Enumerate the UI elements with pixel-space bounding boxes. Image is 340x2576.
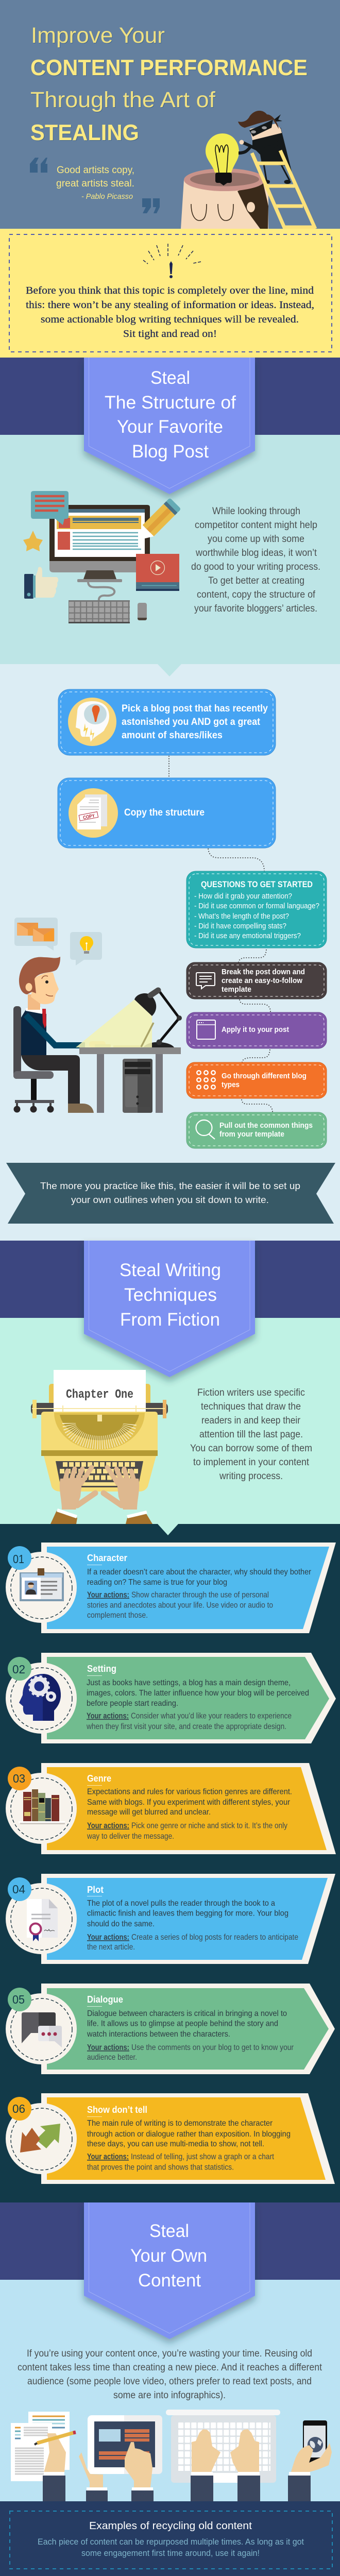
card 05: dialogue: 05 [12, 1993, 25, 2006]
card 04: plot: climactic finish and leaves them begging for more. Your blog [87, 1909, 288, 1918]
step: questions to get started: - Did it have compelling stats? [194, 922, 286, 930]
card 06: show don't tell: Your actions: [87, 2153, 129, 2161]
card 03: genre: way to deliver the message. [87, 1832, 174, 1841]
card 04: plot: the next article. [87, 1943, 135, 1952]
card 02: setting: Setting [87, 1664, 116, 1674]
card 06: show don't tell [6, 2093, 335, 2184]
card 04: plot: should do the same. [87, 1920, 155, 1928]
card 04: plot: Create a series of blog posts for readers to anticipate [131, 1933, 298, 1942]
banner: steal your own content: Steal [149, 2221, 189, 2241]
card 06: show don't tell: these days, you can use multi-media to show, not tell. [87, 2140, 264, 2148]
icon: envelope thought bubble [14, 918, 58, 951]
hand writing on documents [11, 2412, 76, 2501]
text: fiction writers: writing process. [219, 1471, 283, 1482]
ribbon: practice note: The more you practice like this, the easier it will be to set up [40, 1181, 300, 1191]
card 03: genre: Same with blogs. If you experiment with different styles, your [87, 1798, 291, 1807]
card 05: dialogue: Dialogue [87, 1994, 123, 2005]
text: reuse content [18, 2348, 322, 2401]
text: fiction writers: You can borrow some of them [190, 1443, 312, 1454]
banner: steal writing techniques [84, 1241, 255, 1377]
panel: fiction techniques background [0, 1241, 340, 1524]
banner: steal the structure: Blog Post [132, 442, 209, 462]
icon: dot grid [197, 1071, 215, 1089]
text: reuse content: audience (some people love video, others prefer to read text posts, and [27, 2376, 312, 2387]
text: competitor content: competitor content might help [195, 520, 317, 531]
title [30, 23, 308, 145]
card 03: genre: Your actions: [87, 1822, 129, 1830]
card 03: genre: Genre [87, 1773, 111, 1784]
illustration: typewriter [31, 1370, 168, 1524]
card 02: setting: 02 [12, 1663, 25, 1676]
intro text [26, 285, 314, 340]
banner: steal your own content: Your Own [130, 2246, 207, 2266]
step: pick a blog post: Pick a blog post that has recently [122, 703, 268, 714]
banner: steal writing techniques: Techniques [124, 1285, 217, 1305]
connector [242, 1099, 273, 1112]
step: apply it to your post: Apply it to your post [222, 1025, 289, 1034]
card 04: plot: Your actions: [87, 1933, 129, 1942]
text: competitor content: you come up with some [208, 534, 304, 545]
card 05: dialogue: life. It allows us to glimpse at people behind the story and [87, 2020, 278, 2028]
text: fiction writers: attention till the last page. [199, 1429, 303, 1440]
illustration: computer with blog elements [23, 491, 181, 623]
card 01: character: reading on? The same is true for your blog [87, 1578, 227, 1587]
title: STEALING [30, 120, 139, 145]
text: competitor content: worthwhile blog ideas, it won’t [195, 548, 317, 558]
card 02: setting: Your actions: [87, 1711, 129, 1721]
step: questions to get started: - What’s the length of the post? [194, 912, 289, 921]
tablet with hands [79, 2415, 162, 2501]
panel: examples intro: Each piece of content can be repurposed multiple times. As long as it got [38, 2537, 304, 2547]
card 01: character: complement those. [87, 1611, 148, 1620]
title: CONTENT PERFORMANCE [30, 55, 308, 80]
connector [208, 849, 264, 871]
step: break the post down: create an easy-to-follow [222, 976, 302, 985]
illustration: man at desk [13, 918, 182, 1113]
step: pick a blog post: astonished you AND got a great [122, 717, 261, 727]
icon: id badge [20, 1568, 64, 1601]
step: apply it to your post [186, 1012, 327, 1048]
card 02: setting [6, 1653, 336, 1743]
icon: copied document [77, 794, 107, 829]
step: questions to get started: QUESTIONS TO GET STARTED [201, 879, 313, 889]
step: pull out common things [186, 1112, 327, 1148]
title: Improve Your [31, 23, 165, 48]
text: fiction writers: readers in and keep their [201, 1415, 301, 1426]
icon: thumbs up [24, 567, 58, 599]
icon: opposing arrows [20, 2124, 60, 2153]
paper: Chapter One [66, 1388, 133, 1402]
card 06: show don't tell: Show don’t tell [87, 2105, 147, 2115]
card 05: dialogue: audience better. [87, 2053, 137, 2062]
laptop with hands [166, 2410, 280, 2501]
panel: intro note [0, 229, 340, 358]
step: questions to get started [186, 871, 327, 948]
panel: examples intro [0, 2501, 340, 2576]
quote marks [30, 158, 160, 213]
icon: head with brain [76, 701, 109, 742]
text: competitor content: content, copy the structure of [197, 589, 316, 600]
icon: video player [136, 554, 179, 591]
card 01: character: Show character through the use of personal [131, 1591, 269, 1599]
step: pull out common things: from your template [219, 1130, 284, 1139]
card 03: genre: 03 [13, 1772, 25, 1785]
intro text: this: there won’t be any stealing of information or ideas. Instead, [26, 299, 314, 311]
title: Through the Art of [30, 88, 216, 112]
step: break the post down [186, 962, 327, 999]
text: fiction writers: to implement in your content [193, 1457, 310, 1468]
icon: lightbulb thought bubble [70, 932, 102, 965]
step: copy the structure: Copy the structure [124, 807, 205, 818]
intro text: Before you think that this topic is completely over the line, mind [26, 285, 314, 296]
text: competitor content [191, 506, 320, 614]
icon: head with gears [19, 1674, 61, 1721]
banner: steal writing techniques: Steal Writing [120, 1260, 221, 1280]
step: pick a blog post: amount of shares/likes [122, 730, 223, 741]
panel: process flow background [0, 664, 340, 1241]
hands typing [50, 1467, 152, 1524]
card 05: dialogue: Your actions: [87, 2043, 129, 2052]
connector [242, 1049, 270, 1062]
banner: steal the structure [84, 358, 255, 494]
step: questions to get started: - How did it grab your attention? [194, 892, 292, 901]
ribbon: practice note [6, 1163, 335, 1224]
banner: steal the structure: The Structure of [105, 393, 236, 413]
step: go through blog types [186, 1062, 327, 1098]
text: fiction writers: Fiction writers use specific [197, 1387, 305, 1398]
card 03: genre [6, 1763, 336, 1854]
card 05: dialogue: Dialogue between characters is critical in bringing a novel to [87, 2009, 287, 2018]
icon: message [196, 973, 215, 989]
intro text: Sit tight and read on! [123, 328, 217, 340]
card 01: character: stories and anecdotes about your life. Use video or audio to [87, 1601, 273, 1609]
banner: steal the structure: Steal [150, 368, 190, 388]
step: questions to get started: - Did it use common or formal language? [194, 902, 319, 910]
card 03: genre: Pick one genre or niche and stick to it. It’s the only [131, 1822, 287, 1830]
quote text [56, 165, 134, 201]
card 02: setting: when they first visit your site, and create the appropriate design. [86, 1722, 286, 1731]
panel: techniques list background [0, 1524, 340, 2202]
illustration: head with lightbulb [181, 133, 268, 229]
icon: books [19, 1789, 65, 1824]
card 01: character: Character [87, 1553, 127, 1563]
card 04: plot: The plot of a novel pulls the reader through the book to a [87, 1899, 275, 1908]
phone with hand [288, 2420, 332, 2501]
banner: steal your own content [84, 2202, 255, 2339]
icon: certificate [27, 1899, 58, 1941]
card 06: show don't tell: that proves the point and shows that statistics. [87, 2163, 234, 2172]
connector [168, 756, 169, 777]
icon: copied document: COPY [82, 813, 96, 821]
text: reuse content: some are into infographics). [113, 2390, 226, 2401]
icon: pencil [133, 498, 181, 546]
panel: examples intro: Examples of recycling old content [89, 2520, 252, 2532]
step: copy the structure [58, 778, 276, 848]
card 02: setting: Just as books have settings, a blog has a main design theme, [87, 1679, 291, 1687]
card 05: dialogue: Use the comments on your blog to get to know your [131, 2043, 294, 2052]
step: questions to get started: - Did it use any emotional triggers? [194, 931, 301, 940]
desk [79, 1047, 181, 1113]
icon: magnifier [196, 1120, 215, 1139]
banner: steal writing techniques: From Fiction [120, 1310, 220, 1330]
card 03: genre: Expectations and rules for various fiction genres are different. [87, 1788, 292, 1796]
panel: header hero [0, 0, 340, 229]
icon: monitor [49, 505, 150, 601]
quote text: Good artists copy, [57, 165, 134, 176]
icon: keyboard and mouse [69, 600, 147, 623]
icon: browser window [197, 1020, 215, 1039]
text: reuse content: If you’re using your content once, you’re wasting your time. Reusing old [27, 2348, 312, 2359]
icon: speech bubbles [22, 2012, 62, 2047]
panel: steal the structure background [0, 358, 340, 664]
card 06: show don't tell: 06 [12, 2102, 25, 2115]
panel: steal your own content background [0, 2202, 340, 2501]
chair [13, 1006, 54, 1113]
card 06: show don't tell: Instead of telling, just show a graph or a chart [131, 2153, 274, 2161]
quote text: great artists steal. [56, 178, 134, 189]
card 04: plot [6, 1874, 335, 1964]
connector [240, 999, 270, 1012]
connector [239, 950, 266, 962]
ribbon: practice note: your own outlines when you sit down to write. [71, 1195, 269, 1205]
card 04: plot: 04 [12, 1883, 25, 1896]
icon: chat bubble [31, 491, 69, 525]
icon: star [23, 531, 43, 551]
illustration: masked thief on ladder [238, 111, 315, 229]
lamp [76, 990, 182, 1047]
card 05: dialogue: watch interactions between the characters. [87, 2030, 230, 2039]
card 05: dialogue [6, 1984, 335, 2074]
card 03: genre: message will get blurred and unclear. [87, 1808, 211, 1817]
card 02: setting: before people start reading. [87, 1699, 178, 1708]
step: break the post down: Break the post down and [222, 968, 305, 976]
step: pull out common things: Pull out the common things [219, 1121, 313, 1130]
step: go through blog types: Go through different blog [222, 1072, 307, 1080]
step: go through blog types: types [222, 1080, 240, 1089]
card 02: setting: images, colors. The latter influence how your blog will be perceived [87, 1689, 309, 1698]
card 06: show don't tell: through action or dialogue rather than exposition. In blogging [87, 2130, 291, 2139]
text: competitor content: do good to your writing process. [191, 562, 320, 572]
card 04: plot: Plot [87, 1885, 104, 1895]
step: pick a blog post [58, 689, 276, 755]
illustration: hands with devices [11, 2410, 332, 2501]
banner: steal your own content: Content [138, 2270, 201, 2291]
text: fiction writers [190, 1387, 312, 1482]
step: break the post down: template [222, 985, 251, 994]
card 01: character [6, 1543, 336, 1633]
intro text: some actionable blog writing techniques will be revealed. [41, 314, 299, 325]
text: fiction writers: techniques that draw the [201, 1401, 301, 1412]
card 01: character: Your actions: [87, 1591, 129, 1599]
card 01: character: If a reader doesn’t care about the character, why should they bother [87, 1568, 312, 1577]
icon: exclamation mark [143, 244, 201, 278]
paper [54, 1370, 146, 1415]
text: competitor content: While looking through [212, 506, 300, 517]
card 06: show don't tell: The main rule of writing is to demonstrate the character [87, 2119, 273, 2128]
text: competitor content: To get better at creating [208, 575, 304, 586]
text: competitor content: your favorite bloggers’ articles. [194, 603, 317, 614]
banner: steal the structure: Your Favorite [117, 417, 223, 437]
card 01: character: 01 [13, 1552, 24, 1566]
text: reuse content: content takes less time than creating a new piece. And it reaches a different [18, 2362, 322, 2373]
card 02: setting: Consider what you’d like your readers to experience [131, 1711, 292, 1721]
man [19, 957, 94, 1113]
quote text: - Pablo Picasso [81, 192, 133, 201]
panel: examples intro: some engagement first time around, use it again! [81, 2549, 260, 2558]
